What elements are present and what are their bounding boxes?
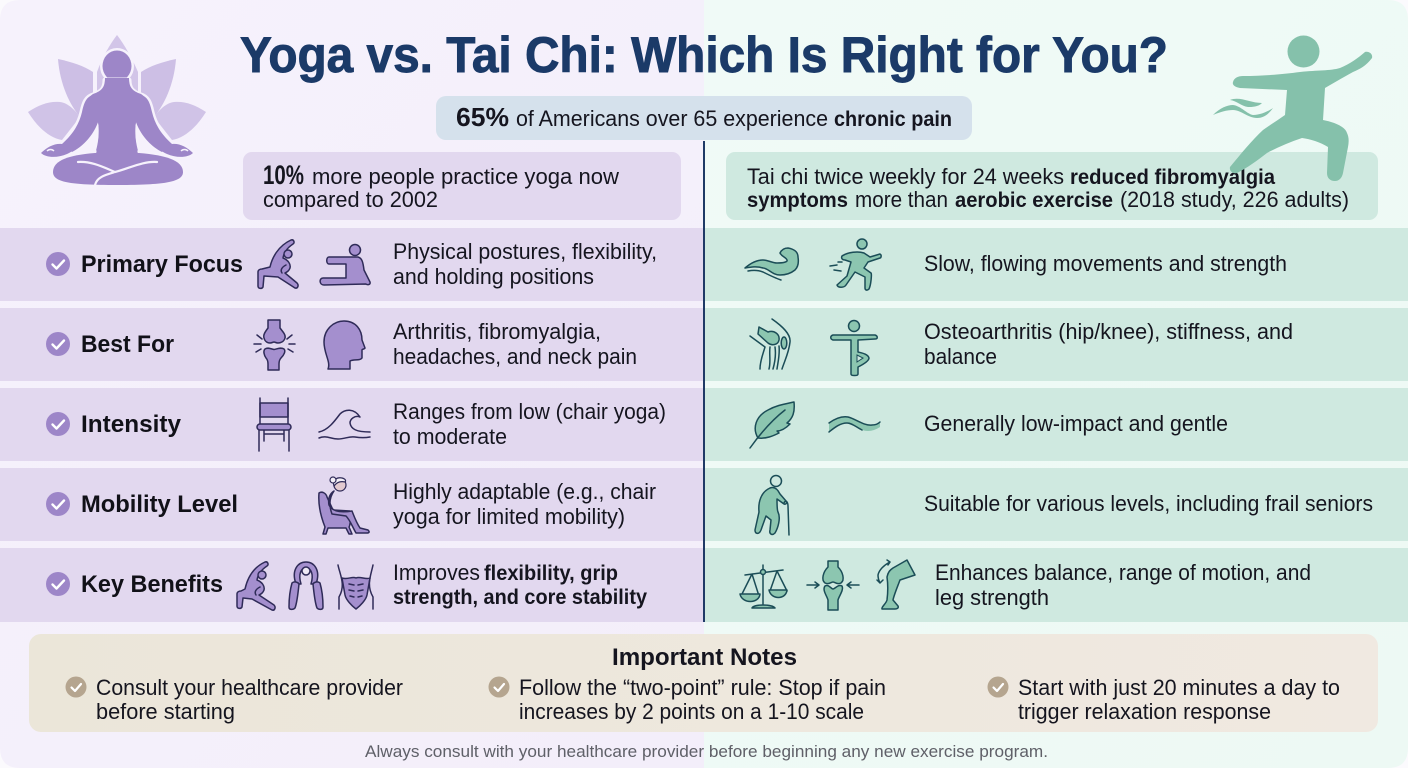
icon: running person — [830, 239, 881, 290]
icon: bent knee with motion arrows — [877, 560, 915, 609]
vertical divider — [703, 141, 705, 622]
description: Generally low-impact and gentle — [924, 411, 1228, 436]
description line 2: leg strength — [935, 585, 1049, 610]
row: primary focus tai chi — [705, 228, 1408, 301]
label: Primary Focus — [81, 251, 243, 278]
icon: senior in armchair — [319, 477, 369, 534]
note 1 — [66, 675, 403, 724]
icon: painful joint — [254, 320, 295, 370]
tai chi figure — [1213, 36, 1372, 181]
row: key benefits tai chi — [705, 548, 1408, 622]
row: mobility level yoga — [0, 468, 703, 541]
footer disclaimer: Always consult with your healthcare provider before beginning any new exercise program. — [365, 742, 1048, 761]
label: Intensity — [81, 411, 182, 438]
notes heading: Important Notes — [612, 644, 797, 671]
row: intensity tai chi — [705, 388, 1408, 461]
yoga statistic box — [243, 152, 681, 220]
icon: flowing wave — [745, 248, 798, 280]
description line 2: balance — [924, 344, 997, 369]
yoga statistic box: compared to 2002 — [263, 187, 438, 212]
note 3 — [988, 675, 1340, 724]
icon: senior with cane — [755, 476, 789, 535]
check icon — [46, 572, 70, 596]
background left panel — [0, 0, 704, 768]
description: Osteoarthritis (hip/knee), stiffness, and — [924, 319, 1293, 344]
tai chi statistic box: more than — [855, 187, 948, 212]
description: Ranges from low (chair yoga) — [393, 399, 666, 424]
tai chi statistic box: symptoms — [747, 188, 848, 212]
tai chi statistic box: reduced fibromyalgia — [1070, 165, 1276, 189]
label: Mobility Level — [81, 491, 238, 518]
icon: feather — [750, 402, 794, 448]
tai chi statistic box: aerobic exercise — [955, 188, 1113, 212]
statistic banner: chronic pain: chronic pain — [834, 107, 952, 131]
icon: chair — [257, 398, 291, 451]
row: best for tai chi — [705, 308, 1408, 381]
row: mobility level tai chi — [705, 468, 1408, 541]
icon: tree balance pose — [831, 320, 877, 376]
icon: side-bend pose — [258, 240, 298, 288]
check icon — [46, 252, 70, 276]
note 3: Start with just 20 minutes a day to — [1018, 675, 1340, 700]
statistic banner: chronic pain — [436, 96, 972, 140]
description: Arthritis, fibromyalgia, — [393, 319, 601, 344]
description: Physical postures, flexibility, — [393, 239, 657, 264]
title: Yoga vs. Tai Chi: Which Is Right for You? — [240, 27, 1168, 83]
description: Improves — [393, 560, 480, 585]
tai chi statistic box: (2018 study, 226 adults) — [1120, 187, 1349, 212]
description: Highly adaptable (e.g., chair — [393, 479, 656, 504]
statistic banner: chronic pain: 65% — [456, 102, 509, 132]
description line 2: strength, and core stability — [393, 585, 647, 609]
tai chi statistic box: Tai chi twice weekly for 24 weeks — [747, 164, 1064, 189]
check icon — [46, 412, 70, 436]
note 3: trigger relaxation response — [1018, 699, 1271, 724]
icon: seated forward stretch — [320, 244, 370, 285]
tai chi statistic box — [726, 152, 1378, 220]
description: Suitable for various levels, including frail seniors — [924, 491, 1373, 516]
note 2 — [488, 675, 886, 724]
description line 2: headaches, and neck pain — [393, 344, 637, 369]
check icon — [46, 492, 70, 516]
label: Key Benefits — [81, 571, 223, 598]
note 2: Follow the “two-point” rule: Stop if pain — [519, 675, 886, 700]
note 1: Consult your healthcare provider — [96, 675, 403, 700]
check icon — [46, 332, 70, 356]
description line 2: and holding positions — [393, 264, 594, 289]
label: Best For — [81, 331, 174, 358]
important notes panel — [29, 634, 1378, 732]
icon: ocean wave — [319, 410, 370, 439]
icon: core torso — [338, 565, 373, 609]
row: intensity yoga — [0, 388, 703, 461]
row: key benefits yoga — [0, 548, 703, 622]
description: Slow, flowing movements and strength — [924, 251, 1287, 276]
row: best for yoga — [0, 308, 703, 381]
description line 2: to moderate — [393, 424, 507, 449]
yoga statistic box: 10% — [263, 160, 304, 190]
row: primary focus yoga — [0, 228, 703, 301]
note 1: before starting — [96, 699, 235, 724]
yoga meditation figure — [28, 35, 206, 185]
background right panel — [704, 0, 1408, 768]
icon: compressed joint — [807, 561, 859, 610]
yoga statistic box: more people practice yoga now — [312, 164, 619, 189]
icon: side-bend pose — [237, 562, 275, 610]
icon: gentle wave — [829, 417, 880, 432]
description bold: flexibility, grip — [484, 561, 618, 585]
note 2: increases by 2 points on a 1-10 scale — [519, 699, 864, 724]
icon: head silhouette — [324, 321, 365, 369]
description: Enhances balance, range of motion, and — [935, 560, 1311, 585]
description line 2: yoga for limited mobility) — [393, 504, 625, 529]
icon: balance scale — [740, 565, 787, 608]
icon: hand grip trainer — [289, 562, 323, 609]
icon: knee anatomy — [750, 319, 790, 369]
statistic banner: chronic pain: of Americans over 65 experience — [516, 106, 828, 131]
